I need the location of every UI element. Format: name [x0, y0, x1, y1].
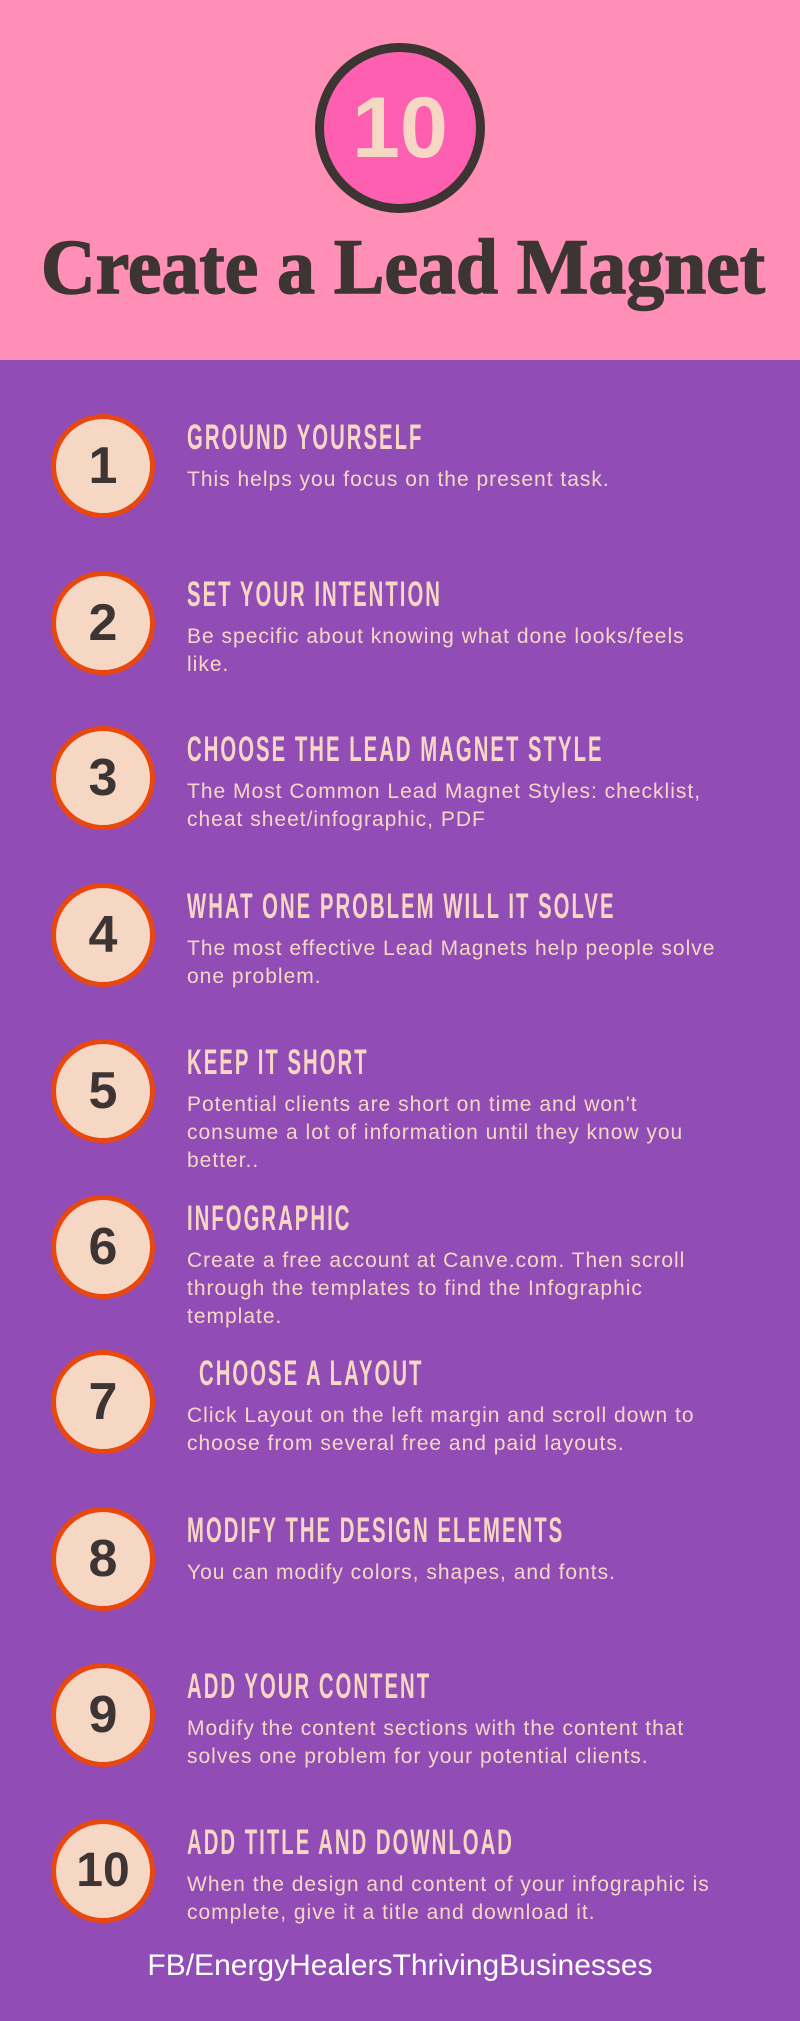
step 5: Potential clients are short on time and won't consume a lot of information until they know you better.. — [187, 1093, 683, 1172]
step 8: 8 — [89, 1530, 117, 1588]
text: ADD YOUR CONTENT — [187, 1667, 431, 1706]
step 4: 4 — [89, 906, 117, 964]
text: ADD TITLE AND DOWNLOAD — [187, 1823, 514, 1862]
text: GROUND YOURSELF — [187, 418, 423, 457]
step 8: You can modify colors, shapes, and fonts. — [187, 1561, 616, 1584]
text: CHOOSE A LAYOUT — [199, 1354, 423, 1393]
step 3: 3 — [89, 749, 117, 807]
text: 10 — [76, 1844, 130, 1897]
step 2: 2 — [89, 594, 117, 652]
step 7: 7 — [89, 1373, 117, 1431]
step 6: 6 — [89, 1218, 117, 1276]
text: KEEP IT SHORT — [187, 1043, 369, 1082]
text: MODIFY THE DESIGN ELEMENTS — [187, 1511, 564, 1550]
step 6: Create a free account at Canve.com. Then scroll through the templates to find the Infographic template. — [187, 1249, 685, 1328]
step 6 — [51, 1195, 685, 1328]
text: INFOGRAPHIC — [187, 1199, 351, 1238]
header panel — [0, 0, 800, 360]
text: CHOOSE THE LEAD MAGNET STYLE — [187, 730, 604, 769]
step 10: When the design and content of your infographic is complete, give it a title and download it. — [187, 1873, 710, 1924]
step 9: 9 — [89, 1686, 117, 1744]
step 3 — [51, 726, 701, 831]
step 9 — [51, 1663, 684, 1768]
text: WHAT ONE PROBLEM WILL IT SOLVE — [187, 887, 616, 926]
step 2 — [51, 571, 685, 676]
badge: 10: 10 — [352, 80, 448, 176]
step 5: 5 — [89, 1062, 117, 1120]
title: Create a Lead Magnet — [41, 223, 765, 310]
step 5 — [51, 1039, 683, 1172]
step 4 — [51, 883, 715, 988]
step 1 — [51, 414, 610, 518]
text: SET YOUR INTENTION — [187, 575, 442, 614]
step 7: Click Layout on the left margin and scroll down to choose from several free and paid layouts. — [187, 1404, 695, 1455]
step 8 — [51, 1507, 616, 1611]
step 9: Modify the content sections with the content that solves one problem for your potential clients. — [187, 1717, 684, 1768]
step 4: The most effective Lead Magnets help people solve one problem. — [187, 937, 715, 988]
step 10 — [51, 1819, 710, 1924]
step 2: Be specific about knowing what done looks/feels like. — [187, 625, 685, 676]
step 1: 1 — [89, 437, 117, 495]
step 7 — [51, 1350, 695, 1455]
step 3: The Most Common Lead Magnet Styles: checklist, cheat sheet/infographic, PDF — [187, 780, 701, 831]
badge: 10 — [315, 43, 485, 213]
footer: FB/EnergyHealersThrivingBusinesses — [147, 1949, 653, 1982]
step 1: This helps you focus on the present task. — [187, 468, 610, 491]
